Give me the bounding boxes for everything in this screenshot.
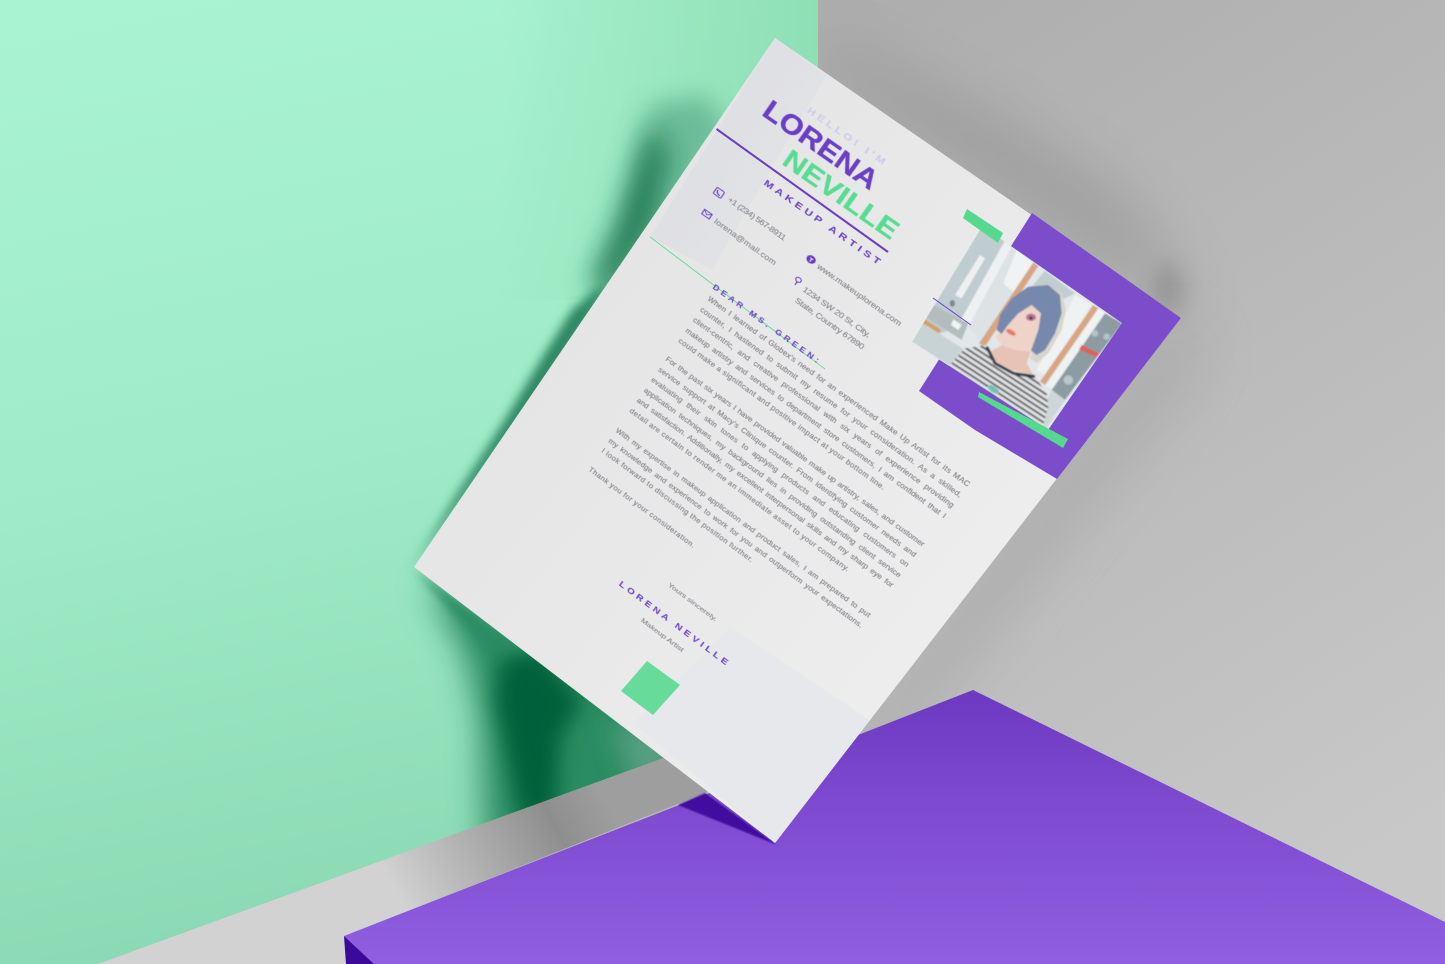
name first line: LORENA bbox=[757, 94, 884, 196]
letter body: counter, I hastened to submit my resume for your consideration. As a skilled, bbox=[699, 305, 964, 499]
job title: MAKEUP ARTIST bbox=[762, 178, 886, 269]
phone number: +1 (234) 567-8911 bbox=[726, 195, 787, 242]
photo: eye bbox=[1026, 314, 1036, 321]
signature name: LORENA NEVILLE bbox=[617, 579, 733, 669]
photo: striped shirt bbox=[948, 345, 1048, 430]
letter body: application techniques, my background lies in providing outstanding client service bbox=[642, 386, 903, 579]
purple block bbox=[344, 690, 1445, 964]
email: lorena@mail.com bbox=[713, 217, 778, 267]
letter body: evaluating their skin tones to applying products and educating customers on bbox=[650, 376, 911, 569]
letter body: client-centric, and creative professional with six years of experience providing bbox=[691, 316, 956, 509]
letter body: and satisfaction. Additionally, my excellent interpersonal skills and my sharp eye for bbox=[635, 396, 895, 589]
accent: bottom green bar bbox=[978, 392, 1068, 448]
panel: purple photo block bbox=[919, 213, 1181, 479]
letter body bbox=[587, 295, 972, 629]
letter body: could make a significant and positive impact at your bottom line. bbox=[677, 337, 887, 492]
letter body: makeup artistry and services to department store customers, I am confident that I bbox=[684, 326, 948, 520]
icon: mail bbox=[700, 208, 714, 220]
salutation: DEAR MS. GREEN: bbox=[711, 283, 824, 366]
accent: green square bbox=[621, 661, 680, 715]
grey wall bbox=[818, 0, 1445, 922]
letter body: detail are certain to render me an immediate asset to your company. bbox=[628, 406, 852, 573]
letter body: For the past six years I have provided valuable make up artistry, sales, and customer bbox=[664, 355, 926, 548]
icon: globe bbox=[806, 254, 816, 264]
letter body: With my expertise in makeup application and product sales, I am prepared to put bbox=[614, 426, 872, 619]
resume text layer bbox=[587, 94, 972, 669]
paper sheet bbox=[414, 38, 1181, 843]
photo: face bbox=[995, 305, 1042, 352]
photo: lips bbox=[1006, 328, 1016, 336]
panel: pale footer block bbox=[633, 627, 870, 843]
address: 1234 SW 20 St, City, bbox=[801, 285, 872, 339]
divider: purple rule under name bbox=[716, 129, 888, 252]
letter body: my knowledge and experience to work for you and outperform your expectations. bbox=[607, 437, 865, 629]
letter body: Thank you for your consideration. bbox=[587, 465, 697, 550]
letter body: service support at Macy's Clinique counter. From identifying customer needs and bbox=[657, 365, 919, 559]
address: State, Country 67890 bbox=[793, 296, 866, 351]
letter body: I look forward to discussing the position further. bbox=[600, 447, 755, 564]
sign-off: Yours sincerely. bbox=[666, 582, 718, 623]
accent: thin line over photo bbox=[933, 298, 971, 325]
name second line: NEVILLE bbox=[777, 144, 905, 246]
photo: neck bbox=[987, 343, 1033, 375]
divider: green rule behind salutation bbox=[650, 237, 825, 369]
grey floor strip bbox=[98, 705, 810, 964]
photo: portrait bbox=[912, 230, 1122, 429]
icon: location pin bbox=[794, 276, 802, 286]
accent: top green bar bbox=[963, 209, 1003, 243]
panel: tinted header band bbox=[650, 38, 826, 270]
photo: hair lining bbox=[1030, 285, 1066, 363]
mint green wall with paper shadows bbox=[0, 0, 818, 964]
photo: hair bbox=[997, 285, 1062, 355]
letter body: When I learned of Globex's need for an experienced Make Up Artist for its MAC bbox=[706, 295, 972, 489]
icon: phone bbox=[712, 186, 726, 199]
signature title: Makeup Artist bbox=[640, 617, 685, 654]
website: www.makeuplorena.com bbox=[815, 262, 903, 328]
hello label: HELLO! I'M bbox=[805, 105, 890, 169]
